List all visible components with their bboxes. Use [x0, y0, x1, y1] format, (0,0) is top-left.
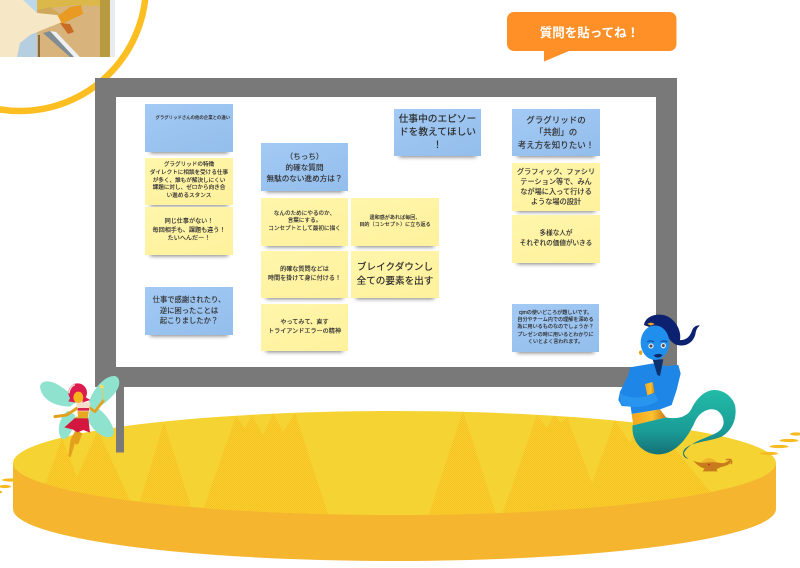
note: graglid features: ダイレクトに相談を受ける仕事 — [150, 170, 228, 176]
note: thanks or trouble question: 仕事で感謝されたり、 — [153, 295, 225, 304]
icon: genie — [618, 315, 736, 459]
note: cjm usage question: 自分やチーム内での理解を深める — [517, 317, 594, 323]
note: graphics and facilitation: グラフィック、ファシリ — [517, 167, 595, 176]
note: thanks or trouble question: 逆に困ったことは — [160, 306, 218, 315]
note: precise questions heading: 的確な質問 — [286, 162, 323, 172]
note: graglid features: い進めるスタンス — [167, 193, 211, 199]
note: return to purpose — [351, 198, 439, 246]
note: no two jobs alike: 同じ仕事がない！ — [165, 218, 213, 225]
note: precise questions heading: （ちっち） — [286, 152, 323, 160]
note: graglid features: が多く、誰もが解決しにくい — [153, 178, 225, 184]
orange dashes right — [760, 432, 800, 455]
note: graphics and facilitation — [512, 163, 600, 211]
note: graglid features — [145, 158, 233, 205]
orange dashes left — [0, 478, 20, 493]
note: break down — [351, 251, 439, 298]
note: take time to learn: 的確な質問などは — [280, 266, 329, 273]
note: cjm usage question: cjmの使いどころが難しいです。 — [519, 310, 592, 316]
note: company difference: グラグリッドさんの他の企業との違い — [156, 115, 230, 120]
note: diverse values: それぞれの価値がいきる — [520, 240, 592, 247]
note: state purpose first: 言葉にする。 — [288, 218, 321, 224]
note: no two jobs alike: たいへんだー！ — [168, 235, 210, 242]
note: return to purpose: 違和感があれば毎回、 — [370, 215, 420, 221]
note: no two jobs alike: 毎回相手も、課題も違う！ — [153, 227, 225, 234]
note: graphics and facilitation: なが場に入って行ける — [520, 187, 592, 196]
photo: person placing notes on a board — [0, 0, 115, 57]
note: episode question: 仕事中のエピソー — [399, 114, 476, 125]
icon: fairy — [40, 376, 119, 457]
note: diverse values: 多様な人が — [540, 230, 572, 237]
note: break down: ブレイクダウンし — [357, 262, 433, 273]
note: diverse values — [512, 215, 600, 263]
note: thanks or trouble question — [145, 287, 233, 335]
dithered light pattern — [45, 411, 713, 520]
note: co-creation question: グラグリッドの — [526, 115, 586, 125]
platform — [0, 411, 776, 561]
note: graglid features: 課題に対し、ゼロから向き合 — [153, 185, 225, 191]
note: cjm usage question — [512, 304, 599, 352]
note: cjm usage question: くいとよく言われます。 — [528, 339, 583, 345]
note: thanks or trouble question: 起こりましたか？ — [160, 316, 218, 325]
icon: magic lamp — [693, 458, 732, 471]
note: episode question: ドを教えてほしい — [399, 127, 476, 138]
board frame and stand — [95, 78, 677, 452]
platform side — [13, 463, 776, 561]
note: trial and error — [261, 304, 348, 351]
note: graphics and facilitation: ような場の設計 — [531, 197, 581, 206]
note: take time to learn: 時間を掛けて身に付ける！ — [268, 274, 341, 282]
note: company difference — [145, 104, 233, 152]
note: episode question — [394, 109, 481, 156]
note: state purpose first: なんのためにやるのか、 — [274, 211, 335, 217]
note: cjm usage question: プレゼンの時に用いるとわかりに — [517, 332, 594, 338]
note: cjm usage question: 為に用いるものなのでしょうか？ — [517, 324, 594, 330]
callout: question prompt — [507, 12, 676, 62]
note: precise questions heading: 無駄のない進め方は？ — [267, 174, 342, 182]
note: co-creation question — [512, 109, 600, 156]
note: return to purpose: 目的（コンセプト）に立ち返る — [359, 222, 431, 228]
note: co-creation question: 「共創」の — [535, 127, 577, 137]
note: precise questions heading — [261, 143, 348, 191]
note: no two jobs alike — [145, 207, 233, 255]
platform top surface — [13, 411, 776, 515]
note: trial and error: やってみて、直す — [280, 319, 329, 326]
note: state purpose first: コンセプトとして最初に描く — [268, 226, 341, 232]
note: trial and error: トライアンドエラーの精神 — [268, 328, 341, 334]
note: state purpose first — [261, 198, 348, 246]
board surface — [116, 97, 656, 367]
note: co-creation question: 考え方を知りたい！ — [518, 140, 594, 150]
callout: question prompt: 質問を貼ってね！ — [540, 26, 639, 40]
note: graglid features: グラグリッドの特徴 — [164, 162, 214, 168]
note: break down: 全ての要素を出す — [357, 276, 433, 286]
note: take time to learn — [261, 251, 348, 298]
note: graphics and facilitation: テーション等で、みん — [520, 177, 592, 186]
note: episode question: ！ — [433, 140, 442, 151]
decorative ring around photo — [0, 0, 146, 111]
